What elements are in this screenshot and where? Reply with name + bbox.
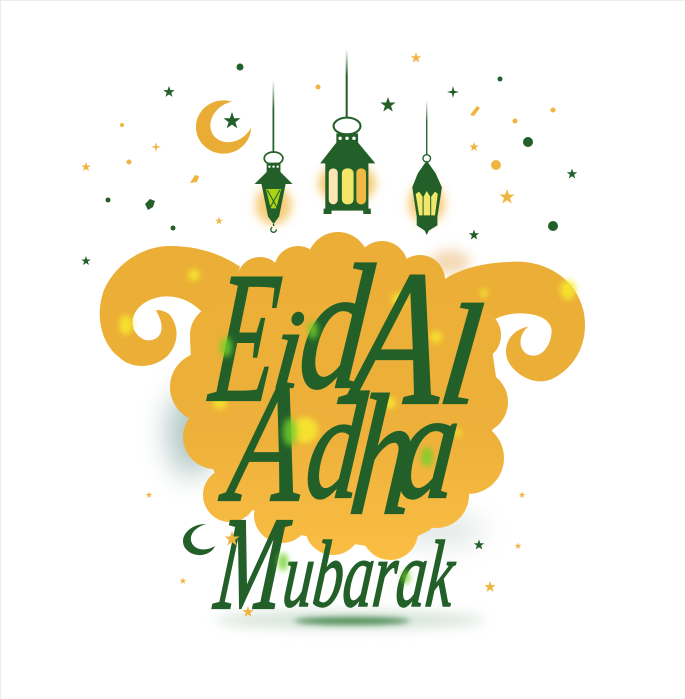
word: Adha (214, 348, 467, 551)
lantern left (255, 80, 293, 232)
lantern right (412, 100, 442, 235)
gold stars (81, 52, 556, 617)
word: Eid: i (268, 288, 309, 412)
lanterns and crescent (196, 49, 445, 235)
word: Eid: E (202, 233, 288, 441)
word: Al: A (333, 231, 457, 445)
word: Adha: d (300, 362, 372, 530)
word: Eid: d (292, 229, 380, 426)
shadow: behind blob left (168, 388, 216, 476)
title: Eid Al Adha (202, 229, 489, 551)
ground shadow (215, 611, 485, 629)
word: Eid (202, 229, 380, 441)
green stars (81, 64, 577, 549)
lantern middle (320, 49, 375, 214)
glow: orange behind blob top right (430, 250, 470, 274)
crescent gold (196, 100, 251, 154)
title: Mubarak: ubarak (279, 523, 461, 627)
crescent green (183, 524, 215, 555)
shadow: behind blob lower right (395, 516, 485, 544)
word: Adha: h (343, 360, 425, 551)
word: Adha: a (390, 359, 467, 531)
wool body (170, 232, 508, 560)
left horn (100, 246, 240, 366)
light spots on blob (119, 269, 576, 443)
highlights on lettering (220, 321, 433, 584)
title: Mubarak (209, 490, 461, 637)
lantern glows (256, 163, 445, 224)
word: Al: l (433, 276, 489, 435)
ram-shaped golden blob (100, 232, 585, 560)
right horn (440, 262, 585, 381)
title: Mubarak: M (209, 490, 296, 637)
word: Adha: A (214, 348, 315, 538)
